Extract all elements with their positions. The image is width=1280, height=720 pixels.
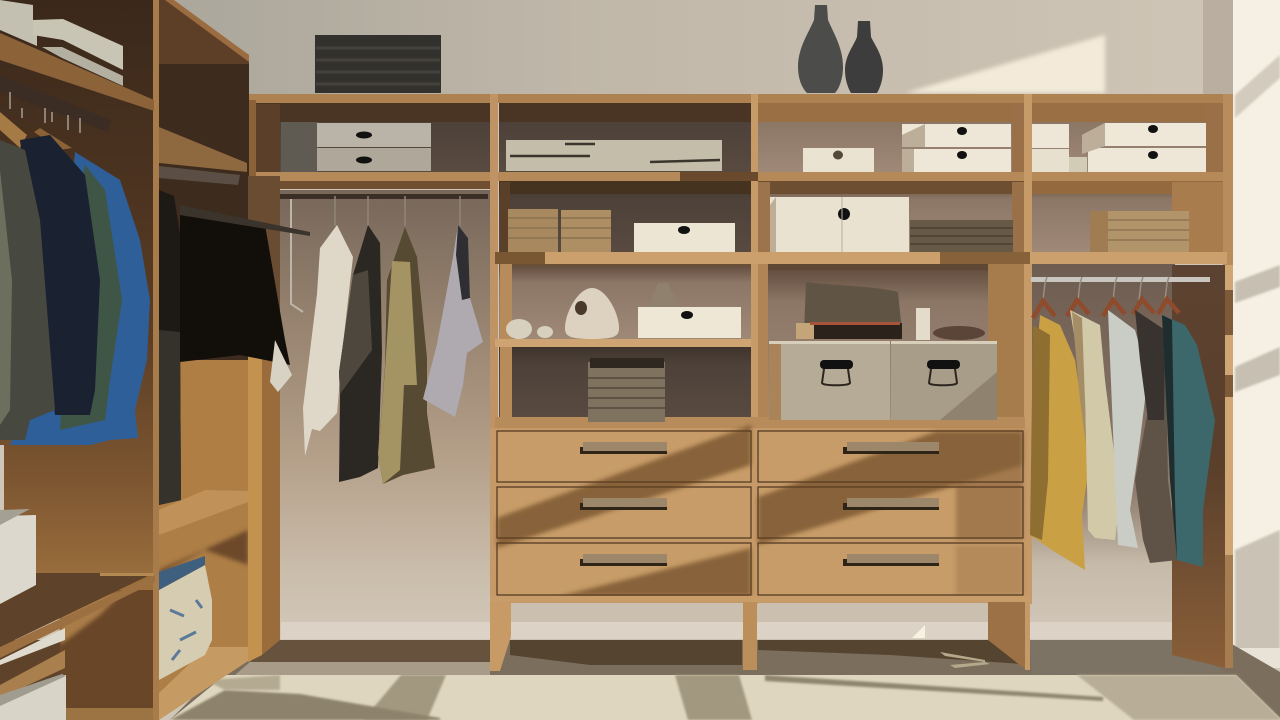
candle and plate [916,308,985,340]
flat patterned box [506,140,722,171]
white shirt [1108,310,1148,548]
left tower [0,0,280,720]
white shirt [303,225,353,456]
shelf objects row 3 [506,282,997,422]
large cream box [770,197,909,252]
drawer handles [580,442,939,566]
right bay back [159,60,249,360]
niche top undersides [757,100,1027,122]
right bay top shelf [157,0,249,64]
grey shirt [423,225,483,417]
navy jacket [20,135,100,415]
cream box [634,223,735,252]
left rod and hangers [0,75,240,185]
blue jacket [10,152,150,445]
boxes row 1 [281,122,1206,172]
grey storage box right [891,341,997,420]
hanger rail [180,205,310,236]
cream stack right [1032,123,1206,172]
wooden hangers [1033,299,1179,318]
dark hanging clothes tower [159,190,310,505]
top shelf [0,33,154,111]
baseboards [281,622,1173,639]
diagonal shadows across drawers [497,425,1023,596]
rod and hooks [1031,277,1210,282]
niche back panels [252,105,492,175]
olive jacket [378,227,435,484]
yellow shirt [1030,315,1090,570]
central shelving unit [248,94,1233,668]
shells [506,319,553,339]
patterned box [159,556,212,680]
shelf shadows [680,172,758,181]
carpet [170,675,1280,720]
right bay bottom shelf [159,647,248,720]
left bay back [0,0,155,600]
front upright [153,0,159,720]
vases on top [798,5,883,93]
dark jacket [159,190,192,505]
small vase [648,283,680,308]
top boxes [0,0,123,86]
right sunlit wall [1233,0,1280,668]
teal shirt [1162,315,1215,567]
right bay lower shelf [159,490,248,535]
hanging clothes right [1030,277,1215,570]
grey storage box left [769,341,890,420]
drawers [490,425,1030,603]
dark grey jacket [339,225,382,482]
wicker baskets [508,209,611,252]
niche side panels [256,104,280,172]
legs of unit [490,596,1030,671]
white cuff [270,340,292,392]
floor [170,640,1280,720]
cream stack [902,124,1011,172]
mid shelf [0,573,154,647]
cream shirt [1070,310,1120,540]
wicker right [1090,211,1189,252]
shelves and uprights [248,94,1232,103]
brown shirt [1135,310,1178,563]
right bay second shelf [159,127,247,172]
side post [248,176,280,662]
folded textile and books [796,282,902,339]
box stack left [281,122,431,172]
left jackets [0,135,150,445]
cream box shelf [638,307,741,338]
lit lower shelf [0,650,65,698]
small cream box [803,148,874,172]
dark wicker [910,220,1013,252]
black skirt [180,215,290,365]
boxes row 2 [508,197,1189,252]
storage basket on top [315,35,441,93]
hanging rod centre [264,194,488,312]
green jacket [60,165,122,430]
grey jacket [0,140,55,440]
right hanging bay panel [1172,265,1225,668]
hanging clothes centre [303,225,483,484]
white ceramic vase [565,288,619,339]
wicker basket lower [588,358,665,422]
white bins [0,509,66,720]
